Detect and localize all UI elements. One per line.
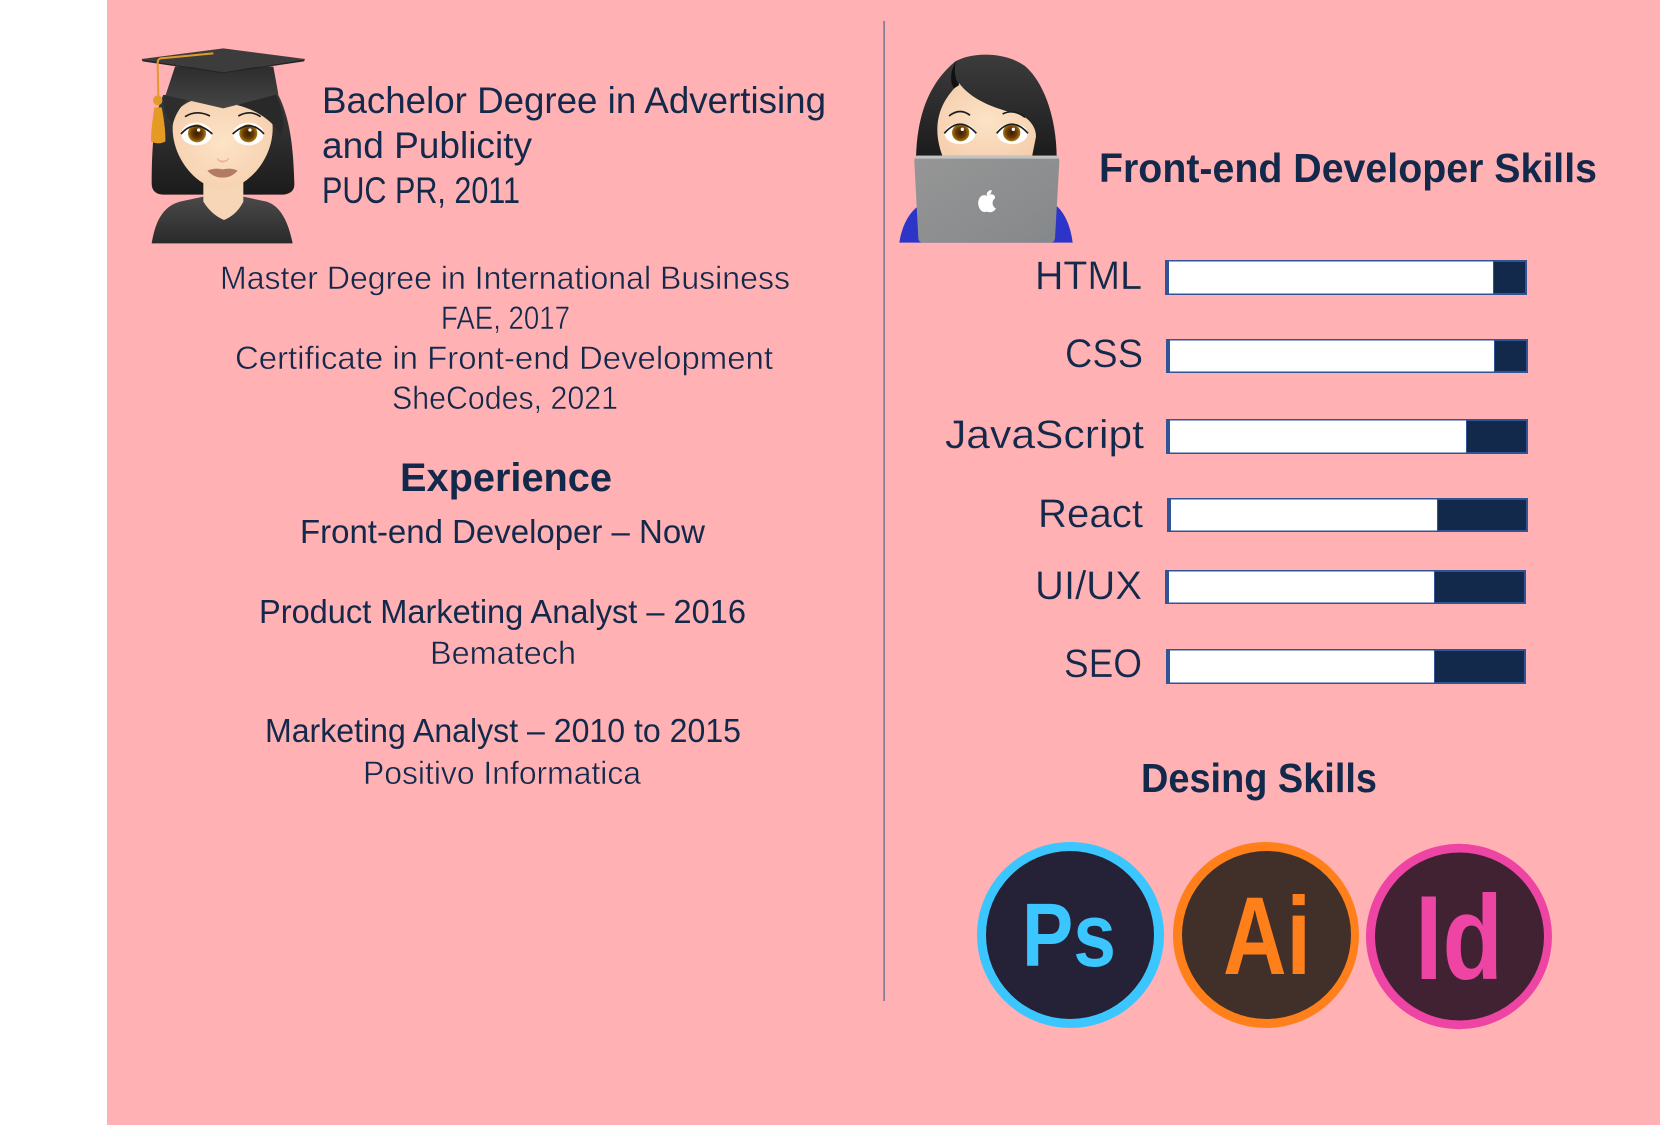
icon: InDesign [1366, 844, 1552, 1029]
skill row: UI/UX: UI/UX [1035, 564, 1142, 608]
icon: Photoshop [977, 842, 1164, 1028]
skill row: React: React [1038, 492, 1143, 536]
text block: further education: SheCodes, 2021 [392, 380, 618, 416]
icon: Illustrator: Ai [1223, 875, 1311, 998]
heading: design skills: Desing Skills [1141, 755, 1377, 801]
skill row: SEO [1064, 642, 1526, 686]
text block: experience list: Bematech [430, 635, 576, 671]
skill row: HTML [1035, 254, 1527, 298]
text block: experience list [259, 513, 746, 791]
icon: InDesign: Id [1415, 871, 1503, 1005]
skill row: CSS: CSS [1065, 332, 1143, 376]
text block: experience list: Positivo Informatica [363, 755, 642, 791]
skill row: React [1038, 492, 1528, 536]
heading: front-end developer skills: Front-end Developer Skills [1099, 145, 1597, 191]
text block: further education: Certificate in Front-end Development [235, 340, 773, 376]
text block: experience list: Front-end Developer – Now [300, 513, 705, 550]
vertical divider [884, 21, 885, 1001]
icon: woman with laptop emoji [899, 55, 1073, 243]
skill row: CSS [1065, 332, 1528, 376]
skill row: HTML: HTML [1035, 254, 1142, 298]
text block: experience list: Product Marketing Analyst – 2016 [259, 593, 746, 630]
text block: experience list: Marketing Analyst – 2010 to 2015 [265, 712, 741, 749]
text block: further education [220, 260, 790, 416]
skill row: JavaScript [945, 413, 1528, 457]
skill row: UI/UX [1035, 564, 1526, 608]
heading: bachelor degree [322, 80, 826, 211]
heading: bachelor degree: PUC PR, 2011 [322, 170, 520, 211]
icon: graduate woman emoji [142, 48, 305, 243]
icon: Illustrator [1173, 842, 1359, 1028]
heading: bachelor degree: and Publicity [322, 125, 532, 166]
text block: further education: FAE, 2017 [441, 300, 570, 336]
heading: experience: Experience [400, 456, 612, 500]
skill row: SEO: SEO [1064, 642, 1142, 686]
heading: bachelor degree: Bachelor Degree in Advertising [322, 80, 826, 121]
icon: Photoshop: Ps [1022, 886, 1116, 986]
skill row: JavaScript: JavaScript [945, 413, 1144, 457]
text block: further education: Master Degree in International Business [220, 260, 790, 296]
